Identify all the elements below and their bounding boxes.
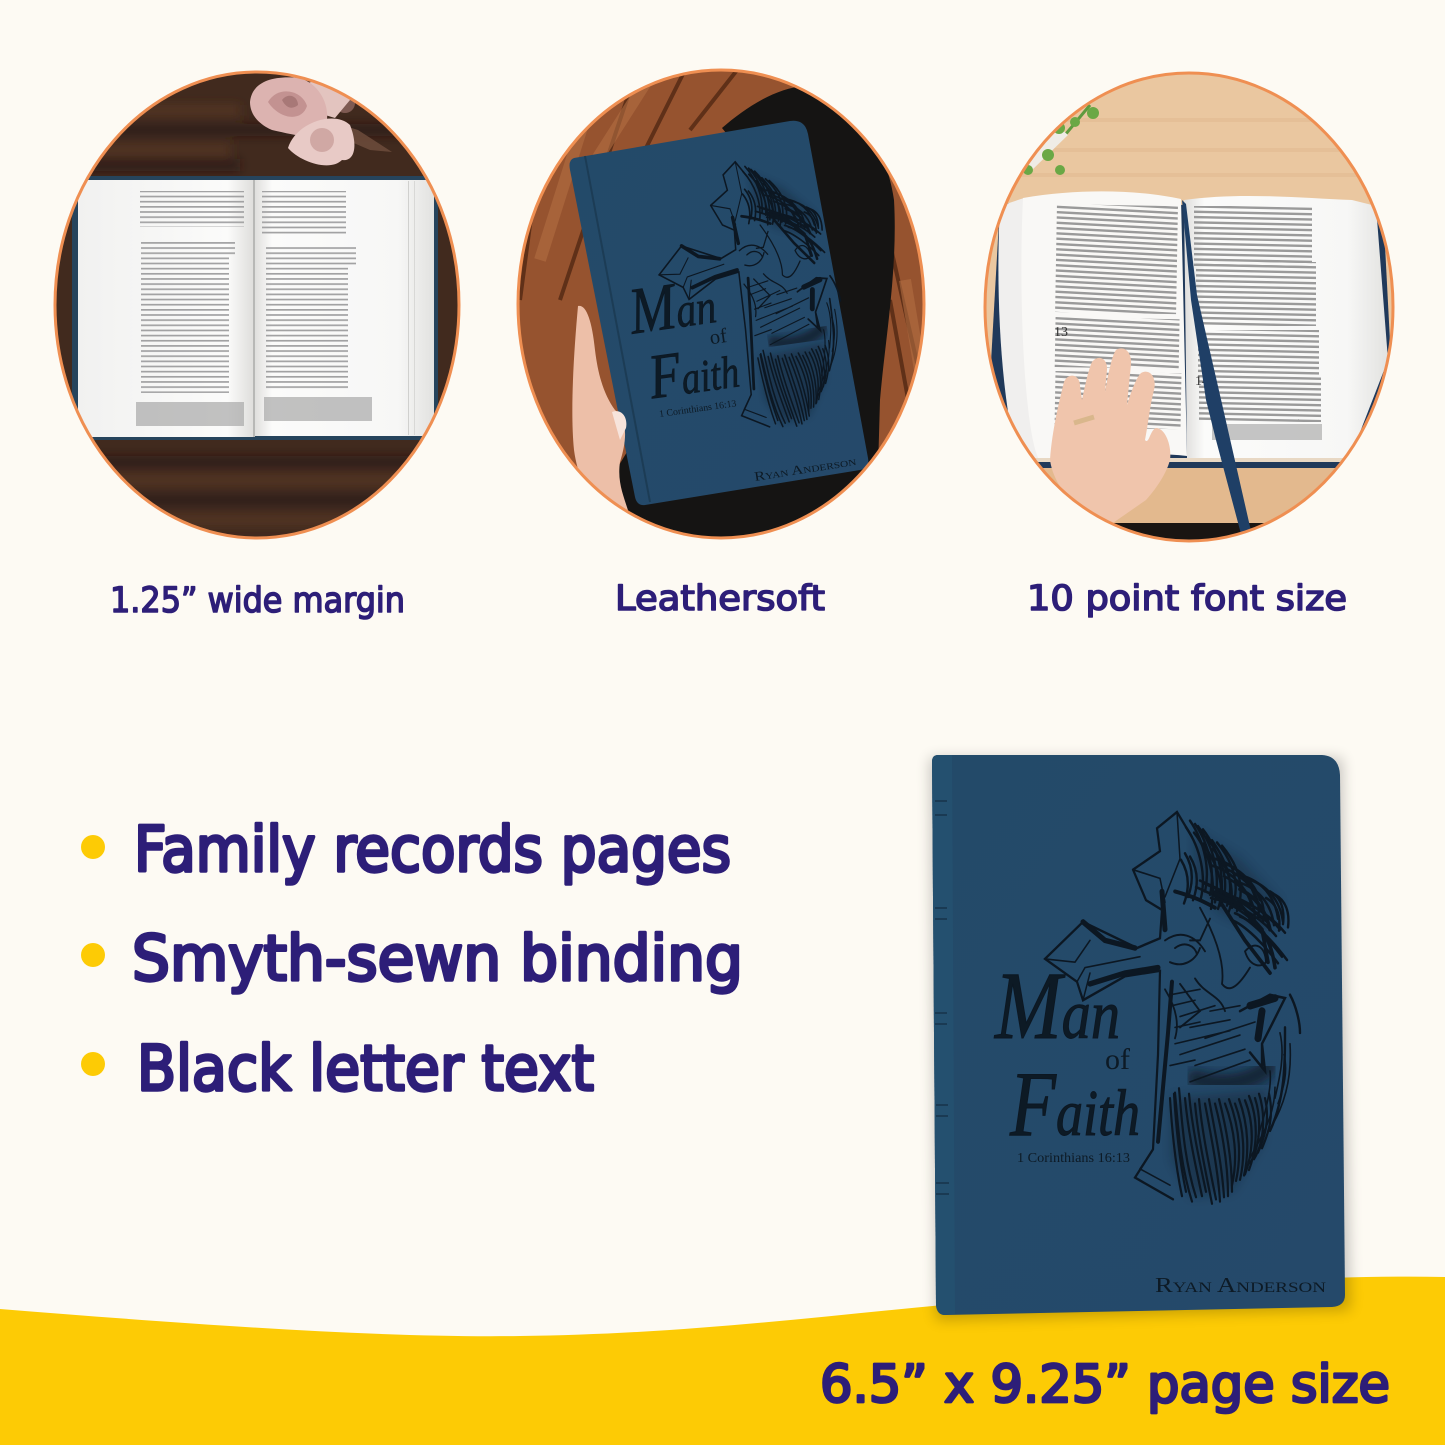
bullet dot [81, 943, 105, 967]
left page text [136, 191, 244, 426]
bullet dot [81, 1052, 105, 1076]
engraved title: Man [624, 264, 720, 349]
spine [932, 755, 955, 1315]
left text: 13 [1054, 325, 1068, 340]
ribbon [1182, 200, 1251, 534]
engraved lion and cross [1045, 812, 1300, 1204]
left page [78, 180, 254, 437]
caption: leathersoft: Leathersoft [615, 579, 825, 619]
personalised name: Ryan Anderson [1155, 1273, 1326, 1297]
left page [1021, 191, 1187, 461]
caption: font size: 10 point font size [1027, 579, 1347, 619]
personalised name: Ryan Anderson [753, 453, 858, 484]
right page text [262, 191, 372, 421]
feature: black letter: Black letter text [137, 1032, 594, 1105]
engraved title: 1 Corinthians 16:13 [1017, 1151, 1130, 1166]
pink roses [250, 77, 392, 165]
page size caption: 6.5” x 9.25” page size [820, 1355, 1390, 1415]
caption: wide margin: 1.25” wide margin [110, 581, 405, 621]
hand [1050, 348, 1170, 525]
large product book [930, 755, 1350, 1320]
orange ring [55, 72, 459, 538]
right text [1194, 206, 1322, 440]
orange ring [518, 70, 924, 538]
engraved title: 1 Corinthians 16:13 [658, 398, 737, 420]
green sprig [1024, 104, 1099, 175]
right text: 14 [1195, 374, 1209, 389]
photo: leathersoft cover held in hand [510, 60, 935, 550]
right page [254, 180, 434, 436]
black clothing [600, 86, 895, 545]
engraved title [632, 284, 740, 417]
engraved title: of [708, 325, 729, 349]
engraved title: Faith [1009, 1053, 1140, 1155]
engraved title: Faith [643, 330, 743, 413]
book cover [932, 755, 1345, 1315]
engraved title: Man [993, 952, 1120, 1059]
orange ring [985, 73, 1393, 541]
blue book [570, 121, 868, 505]
engraved title [993, 952, 1140, 1166]
engraved title: of [1105, 1043, 1130, 1076]
left text [1054, 204, 1181, 429]
book cover [72, 176, 438, 440]
cover and ribbon base [990, 203, 1392, 466]
engraved lion and cross [632, 160, 841, 428]
yellow wave band [0, 1277, 1445, 1445]
holding hand [572, 306, 628, 510]
right page [1184, 196, 1388, 458]
ring [1074, 417, 1094, 423]
feature: binding: Smyth-sewn binding [132, 922, 743, 995]
photo: open bible with hand and ribbon [980, 65, 1400, 545]
feature: family records: Family records pages [134, 813, 731, 886]
page block left [998, 198, 1040, 460]
feature list [81, 813, 743, 1105]
bullet dot [81, 835, 105, 859]
photo: open bible on dark wood [50, 65, 465, 545]
